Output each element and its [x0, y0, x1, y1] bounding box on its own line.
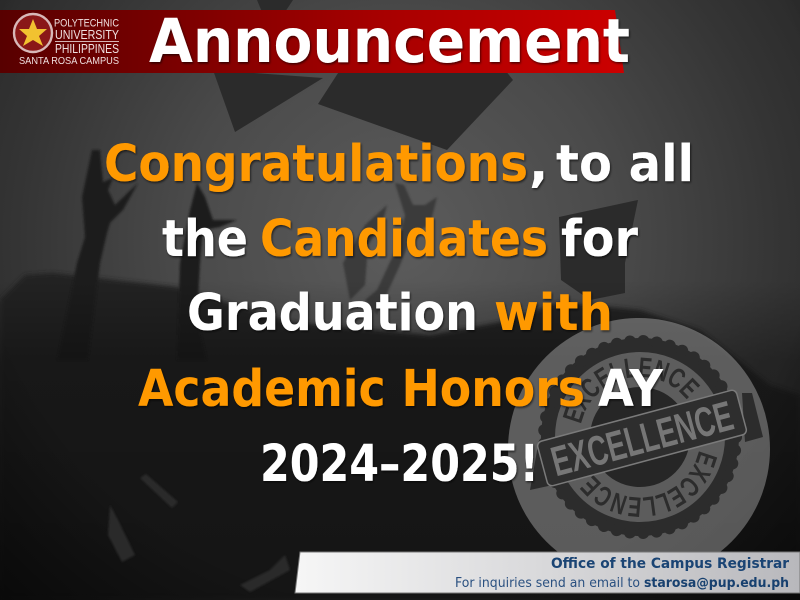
congratulations message: for	[561, 210, 638, 269]
university name: POLYTECHNIC	[54, 18, 119, 30]
congratulations message: Congratulations	[104, 135, 528, 194]
congratulations message: the	[162, 210, 248, 269]
badge centre	[590, 387, 690, 487]
footer bar	[295, 552, 800, 593]
congratulations message: Candidates	[260, 210, 548, 269]
graduation caps in the air	[213, 0, 638, 300]
congratulations message	[104, 135, 694, 494]
university seal	[14, 14, 52, 52]
congratulations message: ,	[529, 135, 548, 194]
curved ring text: EXCELLENCE	[580, 452, 718, 517]
centre hands silhouettes	[343, 183, 437, 315]
ribbon label	[537, 389, 748, 488]
university name: UNIVERSITY	[55, 27, 119, 42]
office name: Office of the Campus Registrar	[551, 556, 790, 572]
header banner	[0, 6, 630, 77]
congratulations message: with	[494, 284, 613, 343]
congratulations message: to all	[556, 135, 694, 194]
congratulations message: 2024–2025!	[260, 435, 539, 494]
title: Announcement	[149, 6, 630, 77]
badge scalloped ring	[544, 341, 736, 533]
inquiries line: For inquiries send an email to starosa@pup.edu.ph	[455, 575, 789, 591]
university name	[19, 18, 119, 67]
congratulations message: Academic Honors	[138, 360, 585, 419]
congratulations message: Graduation	[187, 284, 478, 343]
university name: SANTA ROSA CAMPUS	[19, 55, 119, 67]
university name: PHILIPPINES	[55, 41, 119, 56]
ribbon tails	[530, 393, 763, 490]
crowd and horizon silhouette	[0, 273, 800, 600]
curved ring text: EXCELLENCE	[562, 358, 700, 423]
faint highlights in the crowd	[108, 474, 290, 592]
congratulations message: AY	[598, 360, 664, 419]
excellence badge watermark	[508, 318, 770, 552]
curved ring text	[562, 358, 718, 517]
raised hands silhouettes	[57, 150, 237, 360]
